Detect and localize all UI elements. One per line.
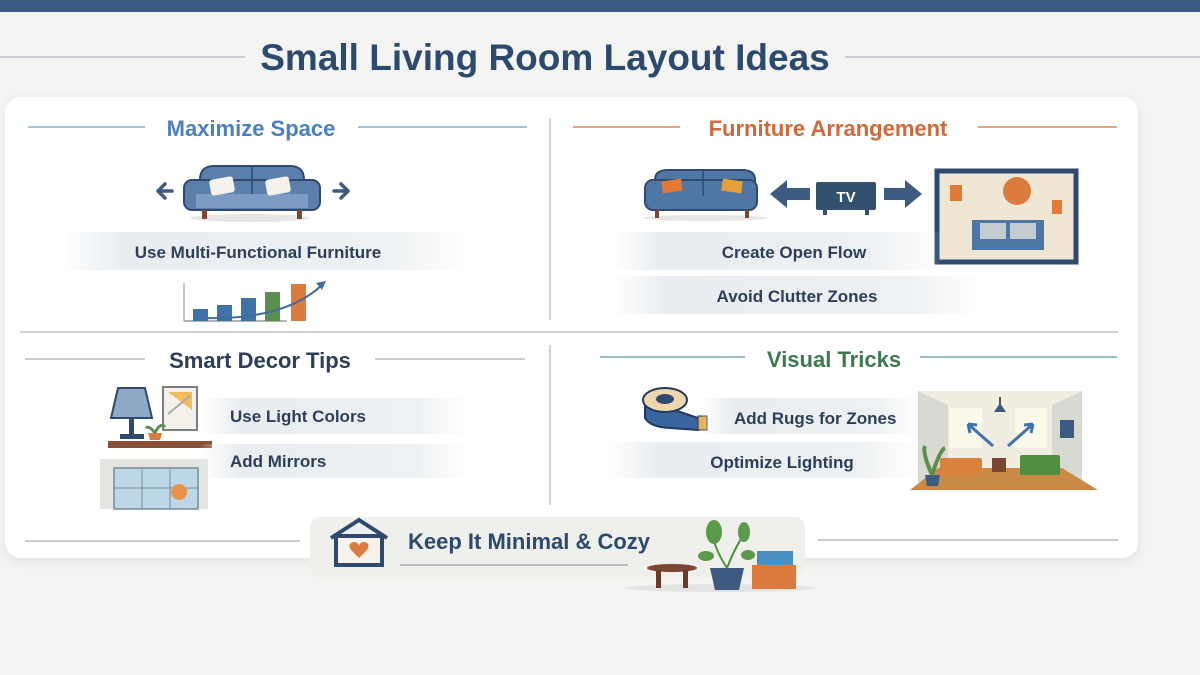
icon: sofa tv arrows: TV <box>836 189 856 206</box>
text: use multi-functional furniture <box>60 232 470 270</box>
text: avoid clutter zones: Avoid Clutter Zones <box>717 287 877 306</box>
panel: smart decor tips <box>25 348 525 509</box>
callout: keep it minimal & cozy: Keep It Minimal & Cozy <box>408 529 651 554</box>
icon: house heart <box>331 520 387 565</box>
text: optimize lighting <box>610 442 920 478</box>
icon: measuring tape <box>643 388 707 430</box>
text: add rugs for zones: Add Rugs for Zones <box>734 409 896 428</box>
top bar <box>0 0 1200 12</box>
icon: lamp shelf window <box>100 387 212 509</box>
panel: visual tricks <box>600 347 1117 490</box>
text: create open flow <box>612 232 942 270</box>
text: add mirrors <box>200 444 470 478</box>
text: add rugs for zones <box>700 398 920 434</box>
heading: smart decor tips: Smart Decor Tips <box>169 348 351 373</box>
text: optimize lighting: Optimize Lighting <box>710 453 854 472</box>
text: avoid clutter zones <box>612 276 982 314</box>
text: use light colors: Use Light Colors <box>230 407 366 426</box>
icon: room illustration <box>910 391 1098 490</box>
bar chart <box>184 281 326 321</box>
icon: sofa tv arrows <box>643 170 922 221</box>
heading: visual tricks: Visual Tricks <box>767 347 901 372</box>
text: use light colors <box>200 398 470 434</box>
text: add mirrors: Add Mirrors <box>230 452 326 471</box>
panel: maximize space <box>28 116 527 321</box>
icon: stool plant books <box>625 520 815 592</box>
bottom lines <box>25 540 300 542</box>
heading: maximize space: Maximize Space <box>167 116 335 141</box>
icon: floor plan <box>937 171 1076 262</box>
main card <box>5 97 1138 558</box>
text: create open flow: Create Open Flow <box>722 243 867 262</box>
heading: furniture arrangement: Furniture Arrangement <box>709 116 948 141</box>
title: Small Living Room Layout Ideas <box>260 37 830 78</box>
text: use multi-functional furniture: Use Multi-Functional Furniture <box>135 243 381 262</box>
icon: sofa with arrows <box>158 166 348 222</box>
callout: keep it minimal & cozy <box>310 517 815 592</box>
panel: furniture arrangement <box>573 116 1117 314</box>
